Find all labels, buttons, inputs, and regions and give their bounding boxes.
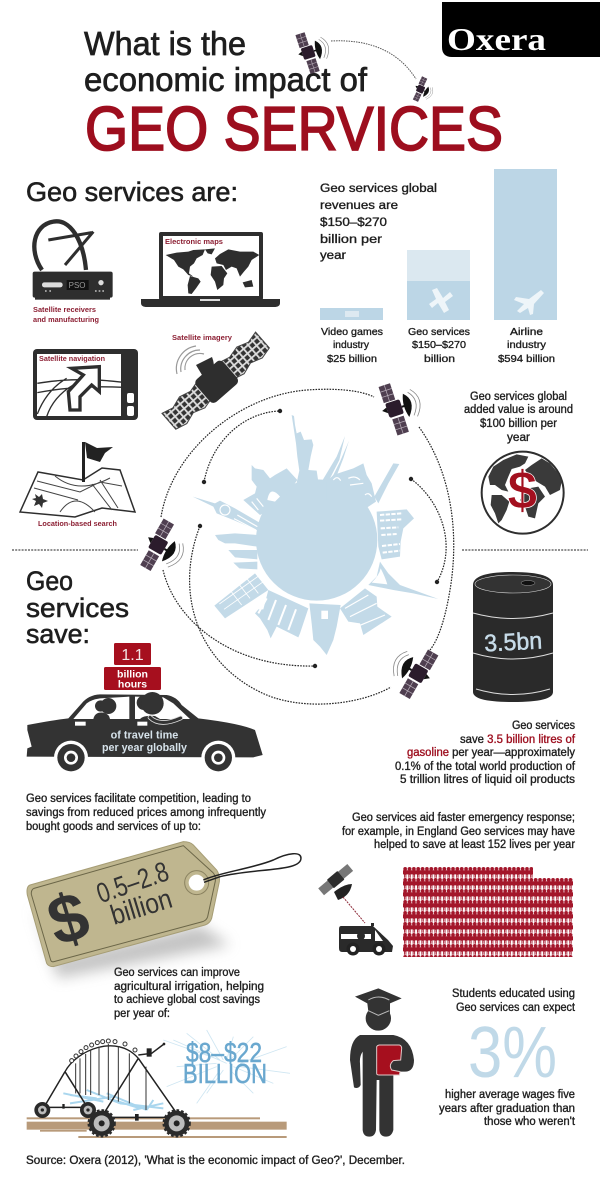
landmark: palace [340, 588, 392, 635]
text: revenues statement: Geo services global [320, 183, 437, 195]
figure: $8–$22 billion [183, 1037, 267, 1089]
text: revenues statement [320, 183, 437, 262]
icon: satellite navigation device [33, 349, 138, 420]
text: added value: Geo services global [470, 391, 567, 403]
icon: satellite in bar [429, 288, 453, 313]
title: What is the [84, 25, 246, 62]
label: satellite receivers: Satellite receivers [33, 305, 96, 314]
orbits [161, 389, 454, 704]
icon: satellite and ambulance [318, 863, 393, 956]
bar labels: Geo services [408, 326, 470, 338]
price text: $ [39, 877, 98, 961]
landmark: cathedral [309, 603, 341, 655]
landmark: right spires [374, 463, 399, 503]
landmark: domed hall [327, 463, 376, 510]
bar chart: global revenues [320, 169, 557, 320]
icon: oil barrel 3.5bn: 3.5bn [483, 627, 543, 657]
title [84, 25, 503, 164]
satellite: lower right [382, 638, 442, 703]
text: gasoline savings: gasoline per year—approximately [407, 747, 575, 759]
text: gasoline savings: Geo services [512, 720, 575, 732]
figure: $8–$22 billion: BILLION [183, 1058, 267, 1089]
landmark: twin spires [323, 436, 349, 482]
icon: globe with dollar [482, 452, 564, 534]
text: irrigation: agricultural irrigation, helping [114, 981, 264, 993]
icon: graduate with book [350, 988, 414, 1137]
red tag: 1.1 billion hours: 1.1 [121, 647, 144, 664]
bar labels: $25 billion [327, 353, 377, 365]
logo: Oxera: Oxera [447, 21, 546, 57]
bar labels: Airline [510, 326, 543, 338]
text: competition: bought goods and services of up to: [26, 821, 201, 833]
satellite: upper right [375, 376, 428, 438]
globe skyline [193, 415, 438, 655]
text: added value: added value is around [464, 404, 573, 416]
icon: laptop with electronic maps: Electronic maps [165, 237, 223, 246]
text: competition: savings from reduced prices among infrequently [26, 807, 266, 819]
figure: 3%: 3% [468, 1013, 557, 1093]
text: irrigation: per year of: [114, 1008, 170, 1020]
label: satellite receivers [33, 305, 99, 324]
label: satellite imagery: Satellite imagery [172, 333, 233, 342]
heading: Geo services save: save: [26, 619, 90, 649]
icon: satellite navigation device: Satellite navigation [39, 354, 105, 363]
text: added value [464, 391, 573, 444]
icon: map with flag [20, 442, 135, 517]
heading: Geo services save [26, 566, 129, 649]
price text: 0.5–2.8 [93, 856, 173, 909]
text: higher wages: higher average wages five [445, 1089, 575, 1101]
text: higher wages: those who weren't [484, 1116, 576, 1128]
text: competition: Geo services facilitate competition, leading to [26, 793, 251, 805]
text: revenues statement: revenues are [320, 200, 398, 212]
landmark: Eiffel Tower [368, 562, 438, 599]
price text: billion [107, 883, 176, 931]
text: added value: $100 billion per [480, 418, 557, 430]
text: competition [26, 793, 266, 833]
bar labels: Video games [321, 326, 383, 338]
price text [39, 856, 176, 961]
icon: plane [514, 290, 544, 315]
text: higher wages: years after graduation than [439, 1103, 575, 1115]
label: location-based search: Location-based search [38, 519, 117, 528]
red tag: 1.1 billion hours: hours [118, 678, 147, 690]
logo: Oxera [442, 2, 600, 57]
text: gasoline savings [395, 720, 576, 786]
text: irrigation: Geo services can improve [114, 967, 240, 979]
heading: Geo services are: Geo services are: [26, 177, 238, 207]
satellite: left [134, 516, 194, 581]
icon: car: of travel time [111, 729, 178, 741]
red tag: 1.1 billion hours: billion [117, 668, 148, 680]
landmark: grid tower [214, 573, 268, 618]
landmark: temple [255, 590, 308, 638]
text: emergency response: Geo services aid faster emergency response; [352, 812, 575, 824]
text: gasoline savings: 5 trillion litres of liquid oil products [400, 774, 575, 786]
text: students [452, 988, 576, 1014]
text: revenues statement: $150–$270 [320, 217, 387, 229]
text: revenues statement: year [320, 250, 346, 262]
bar labels: industry [333, 339, 370, 351]
price tag [27, 842, 301, 978]
heading: Geo services save: services [26, 593, 129, 623]
text: emergency response: for example, in England Geo services may have [342, 826, 575, 838]
text: irrigation [114, 967, 264, 1020]
icon: car [27, 692, 263, 775]
text: emergency response [342, 812, 575, 851]
icon: large imaging satellite [160, 330, 273, 434]
text: added value: year [507, 432, 530, 444]
icon: car: per year globally [102, 742, 188, 754]
title: GEO SERVICES [85, 95, 503, 164]
landmark: sphinx [215, 533, 258, 569]
bar labels: $150–$270 [412, 339, 466, 351]
landmark: Big Ben [193, 497, 261, 532]
text: students: Geo services can expect [456, 1002, 576, 1014]
text: gasoline savings: 0.1% of the total world production of [395, 761, 576, 773]
text: gasoline savings: save 3.5 billion litres of [460, 734, 576, 746]
icon: satellite receivers [33, 221, 113, 300]
landmark: skyscrapers [377, 509, 414, 559]
heading: Geo services save: Geo [26, 566, 73, 596]
bar labels: industry [507, 339, 547, 351]
source note: Source: Oxera (2012), 'What is the economic impact of Geo?', December. [26, 1155, 405, 1167]
figure: $8–$22 billion: $8–$22 [186, 1037, 262, 1068]
title satellites and arc [292, 27, 437, 106]
bar labels: billion [424, 353, 455, 365]
text: revenues statement: billion per [320, 234, 382, 246]
bar labels [321, 326, 555, 365]
text: irrigation: to achieve global cost savings [114, 994, 260, 1006]
landmark: capitol dome [243, 465, 297, 515]
bar labels: $594 billion [498, 353, 555, 365]
landmark: Statue of Liberty [292, 415, 318, 483]
icon: oil barrel 3.5bn [473, 572, 553, 702]
text: emergency response: helped to save at least 152 lives per year [374, 839, 575, 851]
red tag: 1.1 billion hours [104, 643, 161, 690]
text: higher wages [439, 1089, 576, 1128]
title: economic impact of [84, 61, 368, 98]
icon: laptop with electronic maps [141, 232, 280, 307]
pictogram: 152 lives [403, 867, 573, 957]
label: satellite receivers: and manufacturing [33, 315, 99, 324]
icon: globe with dollar: $ [507, 461, 537, 520]
illustration: irrigation rig [27, 1030, 290, 1138]
text: students: Students educated using [452, 988, 575, 1000]
icon: satellite receivers: PSO [69, 281, 86, 290]
